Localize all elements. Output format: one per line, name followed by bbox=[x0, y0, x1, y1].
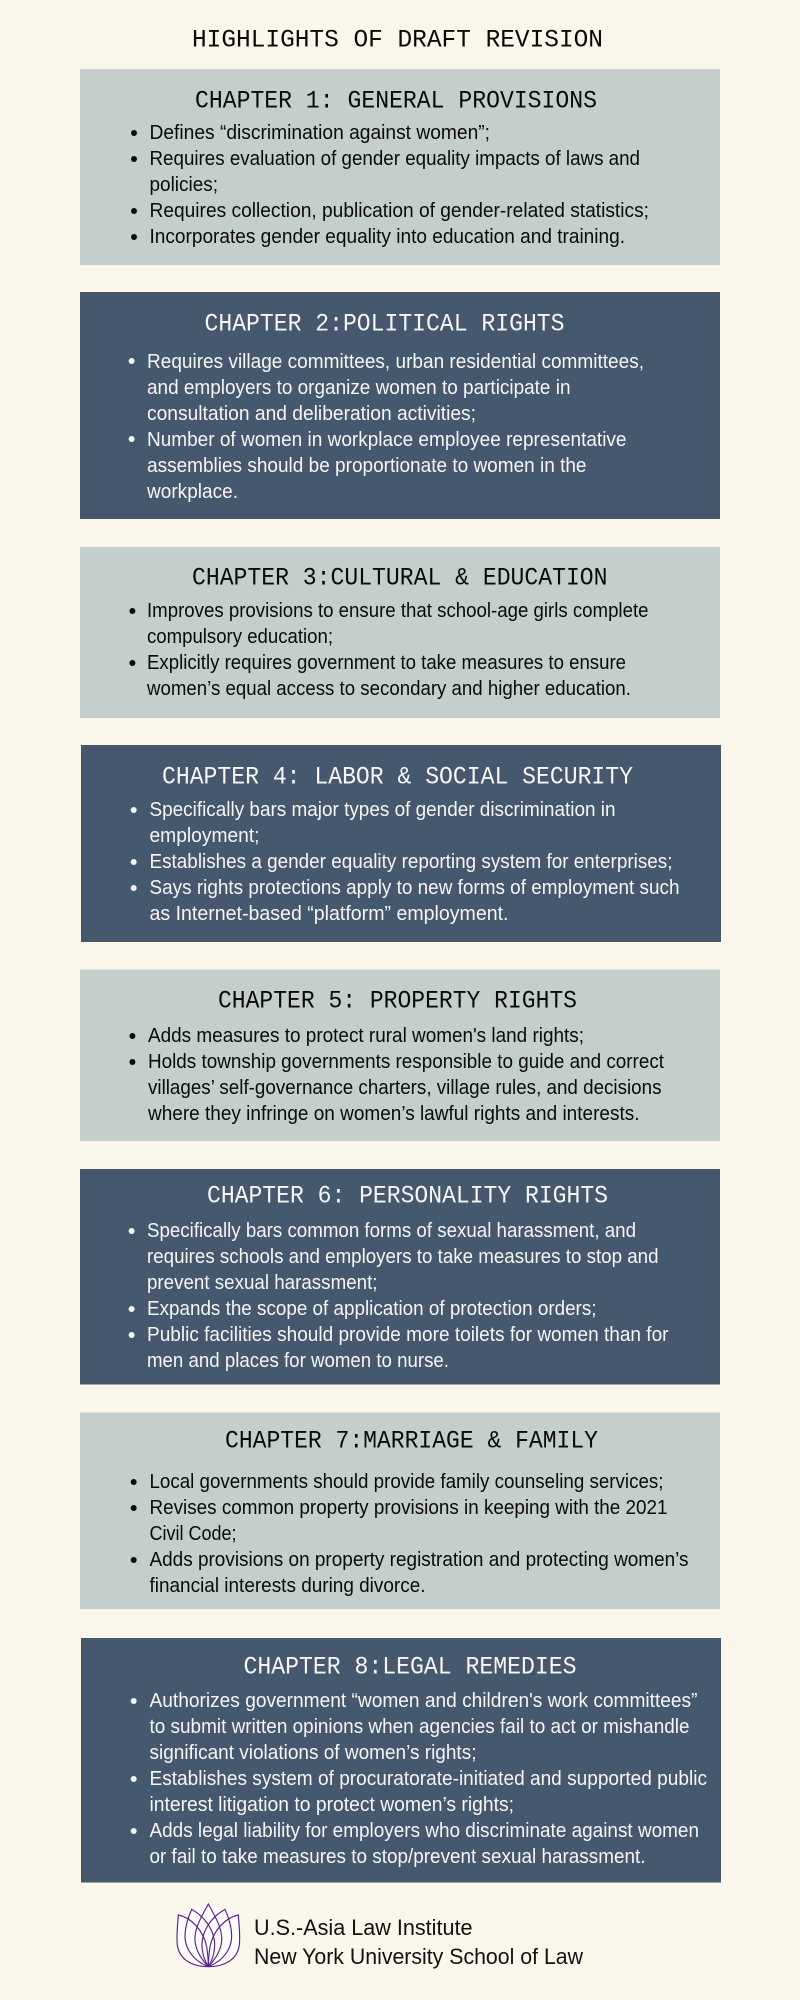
bullet list: chapter 4: Establishes a gender equality reporting system for enterprises; bbox=[150, 851, 672, 873]
bullet list: chapter 4: as Internet-based “platform” employment. bbox=[150, 903, 508, 925]
bullet list: chapter 7 bbox=[131, 1471, 688, 1597]
footer: institute name bbox=[254, 1915, 583, 1969]
bullet list: chapter 1: Defines “discrimination against women”; bbox=[150, 122, 490, 144]
panel: chapter 5 bbox=[80, 970, 720, 1141]
footer: institute name: New York University School of Law bbox=[254, 1944, 583, 1969]
bullet list: chapter 3: Improves provisions to ensure that school-age girls complete bbox=[147, 600, 648, 622]
bullet list: chapter 4: Specifically bars major types of gender discrimination in bbox=[150, 799, 616, 821]
panel: chapter 4 bbox=[81, 745, 721, 942]
bullet list: chapter 6: men and places for women to nurse. bbox=[147, 1350, 449, 1372]
bullet list: chapter 1: policies; bbox=[150, 174, 218, 196]
panel: chapter 8 bbox=[81, 1638, 721, 1882]
bullet list: chapter 7: Local governments should provide family counseling services; bbox=[150, 1471, 664, 1493]
bullet list: chapter 6: Specifically bars common forms of sexual harassment, and bbox=[147, 1220, 636, 1242]
heading: chapter 6: CHAPTER 6: PERSONALITY RIGHTS bbox=[207, 1182, 608, 1210]
bullet list: chapter 3 bbox=[129, 600, 648, 700]
bullet list: chapter 6: requires schools and employers to take measures to stop and bbox=[147, 1246, 658, 1268]
bullet list: chapter 5 bbox=[129, 1025, 664, 1125]
bullet list: chapter 2: assemblies should be proportionate to women in the bbox=[147, 455, 586, 477]
bullet list: chapter 8: Authorizes government “women and children's work committees” bbox=[150, 1690, 698, 1712]
bullet list: chapter 4: employment; bbox=[150, 825, 260, 847]
bullet list: chapter 2: Number of women in workplace employee representative bbox=[147, 429, 626, 451]
panel: chapter 3 bbox=[80, 547, 720, 718]
bullet list: chapter 8: interest litigation to protect women’s rights; bbox=[150, 1794, 514, 1816]
bullet list: chapter 2: and employers to organize women to participate in bbox=[147, 377, 570, 399]
bullet list: chapter 7: Adds provisions on property registration and protecting women’s bbox=[150, 1549, 688, 1571]
bullet list: chapter 7: Revises common property provisions in keeping with the 2021 bbox=[150, 1497, 668, 1519]
bullet list: chapter 4 bbox=[131, 799, 679, 925]
bullet list: chapter 2: consultation and deliberation activities; bbox=[147, 403, 476, 425]
bullet list: chapter 2 bbox=[129, 351, 644, 503]
heading: chapter 3: CHAPTER 3:CULTURAL & EDUCATION bbox=[192, 564, 608, 592]
bullet list: chapter 8: Adds legal liability for employers who discriminate against women bbox=[150, 1820, 699, 1842]
bullet list: chapter 5: Holds township governments responsible to guide and correct bbox=[148, 1051, 664, 1073]
bullet list: chapter 1: Requires evaluation of gender equality impacts of laws and bbox=[150, 148, 640, 170]
panel: chapter 7 bbox=[80, 1412, 720, 1609]
bullet list: chapter 5: where they infringe on women’s lawful rights and interests. bbox=[147, 1103, 639, 1125]
bullet list: chapter 6: Expands the scope of application of protection orders; bbox=[147, 1298, 596, 1320]
heading: chapter 4: CHAPTER 4: LABOR & SOCIAL SECURITY bbox=[162, 762, 633, 792]
icon: lotus logo bbox=[177, 1904, 240, 1967]
bullet list: chapter 5: Adds measures to protect rural women's land rights; bbox=[148, 1025, 584, 1047]
bullet list: chapter 7: Civil Code; bbox=[150, 1523, 236, 1545]
bullet list: chapter 3: compulsory education; bbox=[147, 626, 333, 648]
heading: chapter 8: CHAPTER 8:LEGAL REMEDIES bbox=[244, 1652, 576, 1682]
bullet list: chapter 2: Requires village committees, urban residential committees, bbox=[147, 351, 644, 373]
bullet list: chapter 1: Requires collection, publication of gender-related statistics; bbox=[150, 200, 649, 222]
bullet list: chapter 3: women’s equal access to secondary and higher education. bbox=[146, 678, 631, 700]
bullet list: chapter 8: to submit written opinions when agencies fail to act or mishandle bbox=[150, 1716, 690, 1738]
bullet list: chapter 6: prevent sexual harassment; bbox=[147, 1272, 378, 1294]
bullet list: chapter 4: Says rights protections apply to new forms of employment such bbox=[150, 877, 680, 899]
bullet list: chapter 8: significant violations of women’s rights; bbox=[150, 1742, 476, 1764]
heading: chapter 2: CHAPTER 2:POLITICAL RIGHTS bbox=[204, 310, 564, 338]
panel: chapter 6 bbox=[80, 1169, 720, 1384]
panel: chapter 2 bbox=[80, 292, 720, 519]
footer: institute name: U.S.-Asia Law Institute bbox=[254, 1915, 472, 1940]
bullet list: chapter 8 bbox=[131, 1690, 707, 1868]
bullet list: chapter 2: workplace. bbox=[146, 481, 238, 503]
heading: chapter 5: CHAPTER 5: PROPERTY RIGHTS bbox=[218, 986, 577, 1016]
panel: chapter 1 bbox=[80, 69, 720, 265]
bullet list: chapter 8: or fail to take measures to stop/prevent sexual harassment. bbox=[150, 1846, 646, 1868]
bullet list: chapter 1: Incorporates gender equality into education and training. bbox=[150, 226, 625, 248]
bullet list: chapter 6 bbox=[129, 1220, 669, 1372]
bullet list: chapter 6: Public facilities should provide more toilets for women than for bbox=[147, 1324, 669, 1346]
title: HIGHLIGHTS OF DRAFT REVISION bbox=[192, 25, 603, 54]
heading: chapter 1: CHAPTER 1: GENERAL PROVISIONS bbox=[195, 86, 597, 116]
bullet list: chapter 1 bbox=[131, 122, 649, 248]
bullet list: chapter 5: villages’ self-governance charters, village rules, and decisions bbox=[148, 1077, 662, 1099]
bullet list: chapter 7: financial interests during divorce. bbox=[150, 1575, 426, 1597]
bullet list: chapter 3: Explicitly requires government to take measures to ensure bbox=[147, 652, 626, 674]
bullet list: chapter 8: Establishes system of procuratorate-initiated and supported public bbox=[150, 1768, 707, 1790]
heading: chapter 7: CHAPTER 7:MARRIAGE & FAMILY bbox=[225, 1426, 598, 1456]
